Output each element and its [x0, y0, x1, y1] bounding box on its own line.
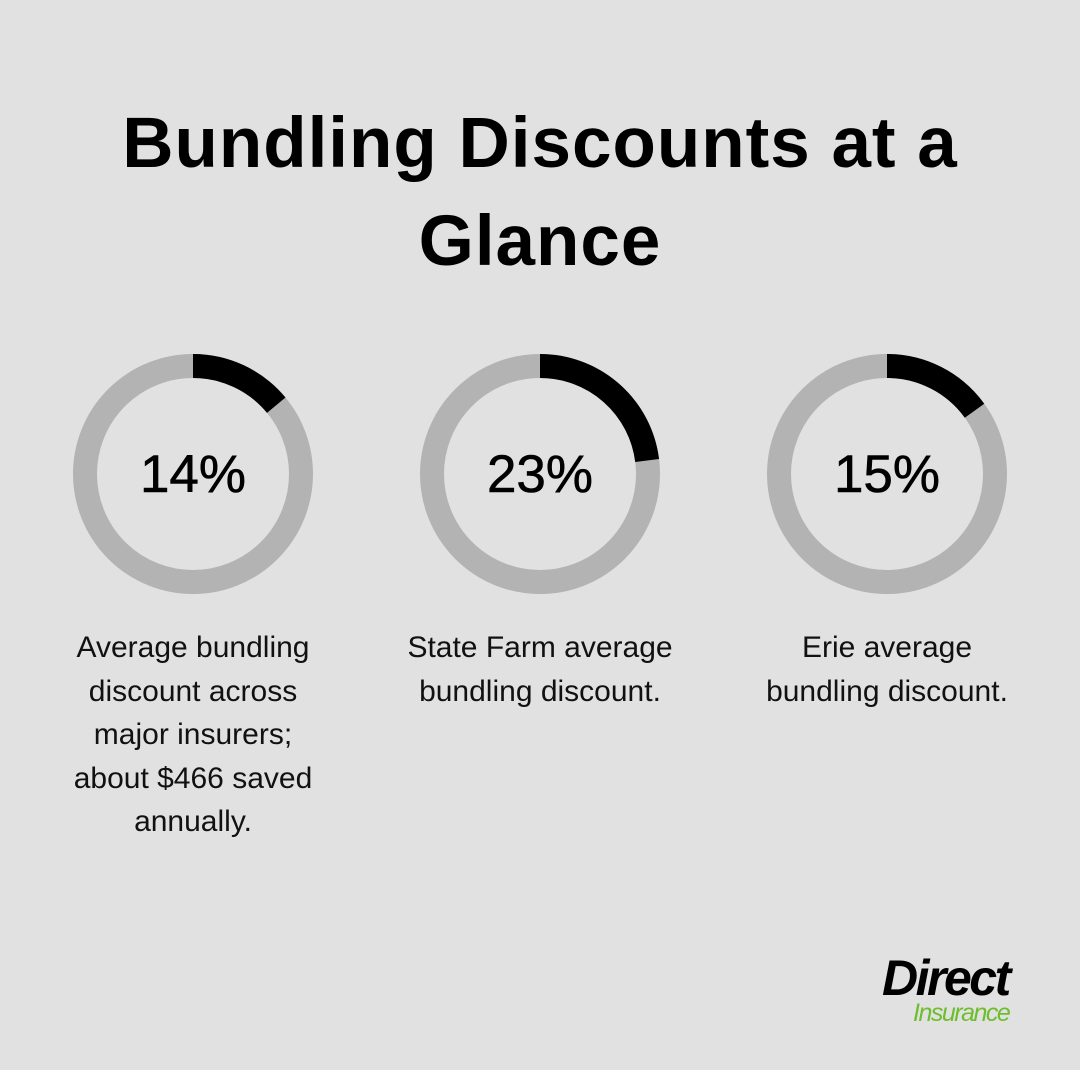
- value: 15%: [834, 445, 940, 504]
- logo: Direct: [882, 950, 1009, 1006]
- title: Glance: [419, 202, 661, 281]
- stat: 23%: [407, 354, 673, 708]
- donut chart 14%: [73, 354, 313, 594]
- title: Bundling Discounts at a: [122, 104, 958, 183]
- description: [74, 631, 312, 838]
- description: State Farm average: [407, 631, 673, 664]
- description: annually.: [134, 805, 252, 838]
- description: Average bundling: [77, 631, 309, 664]
- logo: Insurance: [913, 999, 1009, 1027]
- value: 23%: [487, 445, 593, 504]
- description: discount across: [89, 674, 297, 708]
- description: major insurers;: [94, 718, 292, 751]
- description: about $466 saved: [74, 762, 312, 794]
- value: 14%: [140, 445, 246, 504]
- description: bundling discount.: [766, 674, 1008, 708]
- description: Erie average: [802, 631, 972, 664]
- donut chart 15%: [767, 354, 1007, 594]
- description: [407, 631, 673, 708]
- donut chart 23%: [420, 354, 660, 594]
- stat: 14%: [73, 354, 313, 838]
- description: bundling discount.: [419, 674, 661, 708]
- description: [766, 631, 1008, 708]
- title: [122, 104, 958, 281]
- stat: 15%: [766, 354, 1008, 708]
